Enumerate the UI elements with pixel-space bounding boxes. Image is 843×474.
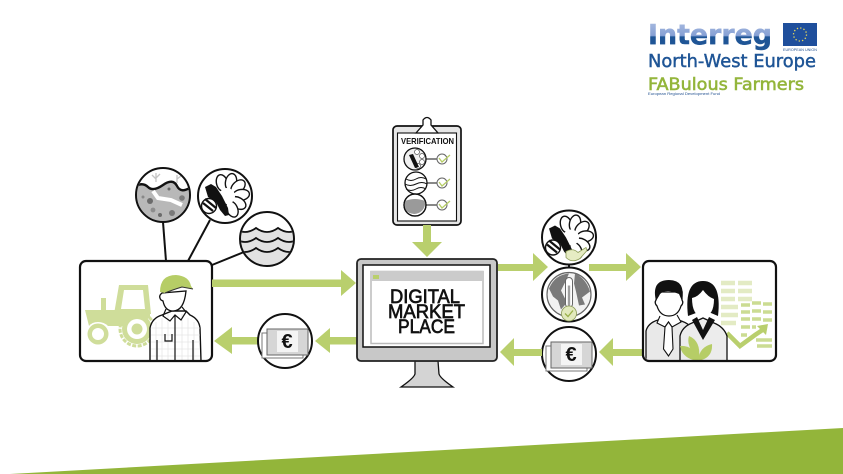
monitor: digital market place <box>357 259 497 387</box>
arrow: verification to marketplace <box>412 225 442 257</box>
FABulous Farmers: FABulous Farmers <box>648 75 804 94</box>
screen text: MARKET <box>388 301 465 323</box>
clipboard: verification <box>393 118 461 225</box>
European Regional Development Fund: European Regional Development Fund <box>648 91 720 96</box>
arrow: buyers to euro <box>599 338 642 366</box>
figure: woman <box>680 281 727 361</box>
screen text <box>388 286 465 338</box>
EU flag <box>783 23 817 46</box>
icon: soil <box>135 168 191 223</box>
screen text: DIGITAL <box>390 286 460 308</box>
icon: euro from buyers <box>542 327 596 381</box>
North-West Europe: North-West Europe <box>648 51 816 72</box>
panel: buyers <box>643 261 776 361</box>
panel: farmer <box>80 261 212 361</box>
arrow: marketplace to biodiversity <box>498 253 548 281</box>
icon: certified biodiversity <box>542 210 596 264</box>
connector lines from farmer to ecosystem icons <box>163 220 244 265</box>
arrow: euro to marketplace <box>500 338 542 366</box>
screen text: PLACE <box>398 316 455 338</box>
connector between bee and globe <box>568 263 570 269</box>
icon: certified climate globe <box>542 268 596 322</box>
clip <box>416 118 438 133</box>
icon: tractor <box>85 285 154 346</box>
European Union caption: EUROPEAN UNION <box>783 47 817 52</box>
green ground band <box>10 428 843 474</box>
growth arrow <box>727 329 764 346</box>
checklist <box>404 148 450 216</box>
figure: man <box>646 280 690 361</box>
logo wordmark Interreg: Interreg <box>648 19 772 51</box>
arrow: euro to farmer <box>214 327 258 354</box>
icon: euro to farmer <box>258 314 312 368</box>
arrow: farmer to marketplace <box>212 270 356 296</box>
stand <box>401 361 453 387</box>
logo: Interreg FABulous Farmers <box>648 19 817 96</box>
plant leaves <box>680 336 712 361</box>
buildings <box>721 283 772 346</box>
figure: farmer <box>150 275 201 361</box>
heading verification: VERIFICATION <box>401 136 454 146</box>
icon: bee on flower <box>198 169 252 223</box>
icon: water <box>239 211 295 267</box>
arrow: marketplace to euro <box>315 328 357 353</box>
arrow: certificates to buyers <box>589 253 641 281</box>
